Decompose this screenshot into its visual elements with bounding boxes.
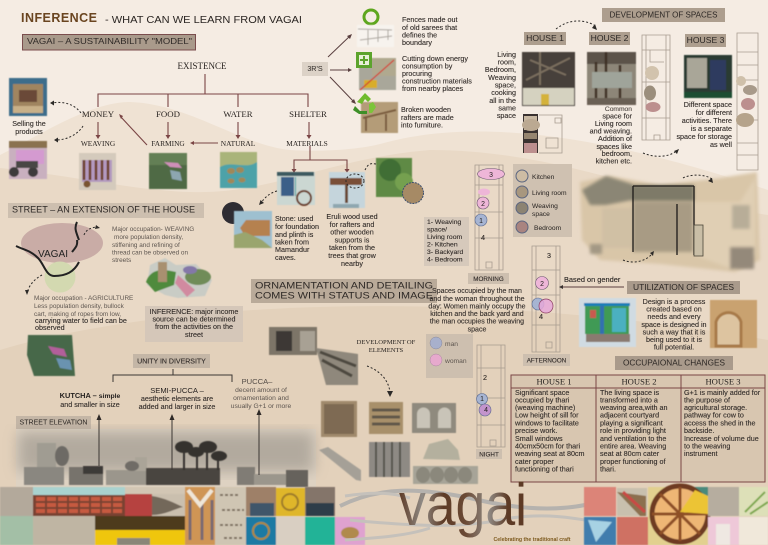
text: development of elements: DEVELOPMENT OF xyxy=(357,339,416,346)
icon: recycle xyxy=(353,93,376,114)
panel: floor plan afternoon xyxy=(523,246,570,366)
existence tree diagram: SHELTER xyxy=(289,109,327,119)
panel: floor plan afternoon: 3 xyxy=(547,251,551,260)
text: reuse, reduce, recycle: Fences made out xyxy=(402,15,458,24)
text: agriculture occupation: cart, making of ropes from low, xyxy=(34,311,121,318)
text: weaving occupation: stiffening and refining of xyxy=(112,242,180,249)
text: weaving occupation: more population density, xyxy=(114,234,183,241)
existence tree diagram: MONEY xyxy=(82,109,115,119)
callout: inference: street xyxy=(185,330,203,339)
text: building types: added and larger in size xyxy=(139,402,215,411)
table: occupational changes: entire area. Weaving xyxy=(600,442,666,450)
table: occupational changes: role in providing light xyxy=(600,426,666,435)
existence tree diagram: FOOD xyxy=(156,109,180,119)
text: reuse, reduce, recycle: into furniture. xyxy=(401,120,443,130)
panel: floor plan morning: MORNING xyxy=(473,276,504,283)
heading: utilization of spaces: UTILIZATION OF SPACES xyxy=(633,283,734,292)
panel: house 1 xyxy=(485,32,575,153)
map: vagai xyxy=(16,222,103,295)
panel: house 3: activities. There xyxy=(682,116,732,125)
panel: floor plan morning: 1 xyxy=(479,218,483,225)
table: occupational changes: Increase of volume due xyxy=(684,434,759,443)
panel: house 1: space, xyxy=(495,80,516,90)
table: occupational changes xyxy=(511,375,765,482)
text: agriculture occupation: Major occupation - AGRICULTURE xyxy=(34,295,133,302)
text: building types: ornamentation and xyxy=(233,395,289,402)
table: occupational changes: playing a significant xyxy=(600,418,663,428)
panel: floor plan morning: 4 xyxy=(481,233,485,242)
text: stone: taken from xyxy=(275,238,309,246)
table: occupational changes: transformed into a xyxy=(600,396,658,404)
text: design is a process: needs and every xyxy=(647,312,701,321)
icon: selling shop painting xyxy=(9,78,47,116)
table: occupational changes: Significant space xyxy=(515,388,569,397)
heading: sustainability model: VAGAI – A SUSTAINABILITY "MODEL" xyxy=(27,36,192,46)
legend: room colours: Living room xyxy=(532,190,567,197)
title: INFERENCE xyxy=(21,11,97,25)
logo: vagai xyxy=(340,471,585,543)
text: stone: Stone: used xyxy=(275,214,313,223)
icon: wooden rafter painting xyxy=(329,172,365,208)
text: stone: caves. xyxy=(275,253,296,262)
panel: house 3: HOUSE 3 xyxy=(687,35,725,45)
text: building types xyxy=(60,377,291,411)
text: eruli wood: other wooden xyxy=(330,228,374,236)
heading: development of spaces xyxy=(602,8,725,22)
table: occupational changes: functioning of thari xyxy=(515,464,574,474)
text: stone: Mamandur xyxy=(275,245,310,254)
text: reuse, reduce, recycle: construction materials xyxy=(402,76,472,86)
text: based on gender xyxy=(559,275,624,289)
panel: house 3: space for storage xyxy=(676,132,732,141)
panel: floor plan morning: 2 xyxy=(481,201,485,208)
icon: green house painting xyxy=(579,298,636,347)
legend: room colours: Bedroom xyxy=(534,225,562,232)
logo: vagai: Celebrating the traditional craft xyxy=(494,537,571,543)
text: development of elements: ELEMENTS xyxy=(369,347,404,354)
icon: ring logo xyxy=(364,10,378,24)
table: occupational changes: weaving seat at 80cm xyxy=(514,449,585,458)
logo: vagai: vagai xyxy=(399,471,527,538)
table: occupational changes: precise work. xyxy=(515,426,557,435)
heading: ornamentation xyxy=(251,279,437,303)
table: occupational changes: weaving area,with an xyxy=(599,403,668,412)
icon: bike painting xyxy=(9,141,47,179)
panel: house 1: cooking xyxy=(491,88,516,97)
panel: house 2: HOUSE 2 xyxy=(591,33,629,43)
table: occupational changes: thari. xyxy=(600,464,616,474)
icon: house material painting xyxy=(277,172,315,205)
caption: selling the products xyxy=(12,119,46,136)
text: reuse, reduce, recycle xyxy=(401,15,472,130)
text: weaving occupation: thread can be observed on xyxy=(112,250,188,256)
text: reuse, reduce, recycle: procuring xyxy=(402,69,432,78)
text: agriculture occupation xyxy=(34,295,133,332)
heading: ornamentation: COMES WITH STATUS AND IMAGE xyxy=(255,290,433,300)
table: occupational changes: (weaving machine) xyxy=(515,403,575,412)
table: occupational changes: proper functioning of xyxy=(600,457,666,466)
text: reuse, reduce, recycle: rafters are made xyxy=(401,113,454,122)
icon: arch painting xyxy=(710,300,757,348)
collage: bottom left textures xyxy=(0,487,365,545)
panel: floor plan afternoon: 4 xyxy=(539,312,543,321)
text: agriculture occupation: Less population density, bullock xyxy=(34,303,125,310)
text: building types: and smaller in size xyxy=(60,400,120,409)
table: occupational changes: cater proper xyxy=(515,457,554,466)
text: building types: KUTCHA – simple xyxy=(60,391,121,400)
icon: street painting xyxy=(146,258,212,298)
photos: ornament elements xyxy=(319,401,478,484)
text: spaces occupied by gender: space xyxy=(468,326,486,334)
map: vagai: VAGAI xyxy=(38,248,68,260)
arrow: elements xyxy=(367,366,393,397)
table: occupational changes: backside. xyxy=(684,426,714,435)
icon: tree photo xyxy=(376,158,413,197)
table: occupational changes: adjacent courtyard xyxy=(600,410,659,420)
legend: room numbers: 3- Backyard xyxy=(427,249,463,256)
panel: house 1: all in the xyxy=(489,96,516,105)
3R's label: 3R'S xyxy=(307,64,323,73)
heading: street elevation: STREET ELEVATION xyxy=(20,418,88,426)
text: spaces occupied by gender: the man occupies the weaving xyxy=(430,318,524,326)
panel: floor plan afternoon: 2 xyxy=(540,281,544,288)
heading: unity in diversity: UNITY IN DIVERSITY xyxy=(137,358,206,366)
text: building types: SEMI-PUCCA – xyxy=(150,386,205,395)
text: reuse, reduce, recycle: Broken wooden xyxy=(401,105,451,114)
text: agriculture occupation: carrying water to field can be xyxy=(35,316,127,325)
text: building types: PUCCA– xyxy=(242,377,273,386)
text: eruli wood: for rafters and xyxy=(330,220,374,229)
heading: occupational changes: OCCUPAIONAL CHANGES xyxy=(623,358,725,368)
panel: house 2: Common xyxy=(605,106,632,113)
legend: man and woman: woman xyxy=(444,358,467,365)
text: reuse, reduce, recycle: of old sarees that xyxy=(402,23,457,32)
panel: floor plan morning: 3 xyxy=(489,172,493,179)
panel: house 2: and weaving. xyxy=(590,126,632,136)
table: occupational changes: HOUSE 1 xyxy=(536,376,572,386)
legend: room numbers: Living room xyxy=(427,234,462,241)
title xyxy=(21,11,302,26)
text: reuse, reduce, recycle: boundary xyxy=(402,38,432,47)
panel: house 1: HOUSE 1 xyxy=(526,33,564,43)
panel: floor plan night: 4 xyxy=(484,407,488,414)
text: building types: decent amount of xyxy=(235,387,287,394)
table: occupational changes: HOUSE 2 xyxy=(621,376,657,386)
table: occupational changes: Low height of sill for xyxy=(515,410,579,420)
text: based on gender: Based on gender xyxy=(564,275,621,284)
text: reuse, reduce, recycle: defines the xyxy=(402,30,437,40)
icon: weaving loom painting xyxy=(79,153,116,190)
icon: rafter furniture photo xyxy=(361,102,398,133)
panel: house 1: same xyxy=(498,104,516,112)
text: spaces occupied by gender: day: Women mainly occupy the xyxy=(428,304,526,310)
text: spaces occupied by gender: and the woman throughout the xyxy=(430,296,525,303)
text: eruli wood: supports is xyxy=(335,236,370,244)
text: reuse, reduce, recycle: Cutting down energy xyxy=(402,54,468,63)
text: design is a process: being used to it is xyxy=(646,335,702,344)
text: eruli wood: taken from the xyxy=(329,243,375,252)
panel: house 2: Living room xyxy=(595,119,632,128)
icon: energy square xyxy=(356,52,372,68)
text: spaces occupied by gender: Spaces occupied by the man xyxy=(432,288,522,295)
table: occupational changes: 40cmx50cm for thari xyxy=(515,442,581,450)
collage: bottom right textures xyxy=(584,486,768,545)
heading: street xyxy=(8,203,204,218)
panel: house 3: as well xyxy=(710,140,732,149)
table: occupational changes: seat at 80cm cater xyxy=(600,449,660,458)
icon: natural water painting xyxy=(220,152,257,188)
legend: room colours: Kitchen xyxy=(532,174,555,181)
panel: house 1: Weaving xyxy=(488,73,516,82)
legend: room colours xyxy=(513,164,572,237)
legend: room numbers: 2- Kitchen xyxy=(427,242,458,248)
existence tree diagram: WATER xyxy=(223,109,253,119)
callout: inference: from the activities on the xyxy=(155,322,233,331)
table: occupational changes: HOUSE 3 xyxy=(705,376,741,386)
table: occupational changes: Small windows xyxy=(515,434,563,443)
legend: man and woman: man xyxy=(445,341,458,348)
legend: man and woman xyxy=(426,334,473,378)
panel: house 3: for different xyxy=(696,108,732,117)
panel: floor plan night: 1 xyxy=(480,396,484,403)
text: reuse, reduce, recycle: from nearby places xyxy=(402,84,464,93)
panel: house 1: Living xyxy=(497,50,516,59)
text: weaving occupation: streets xyxy=(112,257,131,264)
panel: house 3: is a separate xyxy=(691,124,732,133)
existence tree diagram: FARMING xyxy=(151,139,185,148)
legend: room numbers: space/ xyxy=(427,226,447,234)
panel: floor plan night: 2 xyxy=(483,373,487,382)
icon: road photo xyxy=(359,58,396,90)
panel: floor plan afternoon: AFTERNOON xyxy=(527,358,567,364)
text: reuse, reduce, recycle: consumption by xyxy=(402,62,453,70)
existence tree diagram xyxy=(81,61,350,173)
heading: unity in diversity xyxy=(113,354,232,382)
icon: cave painting xyxy=(234,211,272,248)
heading: ornamentation: ORNAMENTATION AND DETAILING xyxy=(255,280,433,290)
panel: floor plan night: NIGHT xyxy=(479,452,499,458)
existence tree diagram: NATURAL xyxy=(221,139,256,148)
icon: wood texture circle xyxy=(402,182,424,204)
heading: sustainability model xyxy=(22,34,196,50)
text: eruli wood: Eruli wood used xyxy=(326,212,378,221)
panel: house 1: Bedroom, xyxy=(485,65,516,74)
text: stone: and plinth is xyxy=(275,230,314,239)
table: occupational changes: and ventilation to the xyxy=(600,434,666,443)
panel: house 3 xyxy=(676,33,758,170)
text: design is a process: space is designed in xyxy=(641,320,707,329)
table: occupational changes: the purpose of xyxy=(684,396,730,404)
panel: house 2 xyxy=(587,32,670,166)
text: stone: for foundation xyxy=(275,222,319,231)
text: building types: aesthetic elements are xyxy=(141,394,213,403)
panel: floor plan morning xyxy=(468,165,509,284)
existence tree diagram: EXISTENCE xyxy=(178,61,227,71)
table: occupational changes: access the shed in the xyxy=(684,418,756,428)
table: occupational changes: agricultural storage. xyxy=(684,403,747,412)
arrows: 3R's to examples xyxy=(328,34,356,104)
text: design is a process: Design is a process xyxy=(643,297,706,306)
text: weaving occupation xyxy=(112,226,194,264)
text: spaces occupied by gender: kitchen and the back yard and xyxy=(430,311,524,318)
panel: house 1: space xyxy=(497,111,516,120)
table: occupational changes: windows to facilitate xyxy=(514,418,579,428)
table: occupational changes: G+1 is mainly added for xyxy=(684,388,761,397)
title: - WHAT CAN WE LEARN FROM VAGAI xyxy=(105,15,302,26)
arrows: money to selling xyxy=(50,100,83,142)
arrows: material details xyxy=(259,164,376,205)
icon: farming painting xyxy=(149,153,187,189)
existence tree diagram: MATERIALS xyxy=(286,139,328,148)
heading: occupational changes xyxy=(615,356,733,370)
legend: room colours: Weaving xyxy=(532,203,558,210)
panel: floor plan night xyxy=(476,345,505,459)
icon: farm painting xyxy=(27,335,75,376)
panel: house 2: space for xyxy=(602,112,633,120)
table: occupational changes: pathway for cow to xyxy=(684,410,744,420)
caption: selling the products: Selling the xyxy=(12,119,46,128)
callout: inference xyxy=(145,306,243,342)
arrow: house 1 to house 2 xyxy=(556,21,597,30)
street elevation drawing xyxy=(16,409,316,487)
panel: house 2: spaces like xyxy=(596,142,632,151)
text: agriculture occupation: observed xyxy=(35,323,65,332)
panel: house 2: bedroom, xyxy=(602,149,632,158)
legend: room colours: space xyxy=(532,211,550,218)
table: occupational changes: The living space is xyxy=(600,388,660,397)
arrow: house 2 to house 3 xyxy=(643,149,679,156)
heading: street: STREET – AN EXTENSION OF THE HOUSE xyxy=(12,204,195,214)
text: eruli wood: nearby xyxy=(341,259,363,268)
heading: development of spaces: DEVELOPMENT OF SPACES xyxy=(610,10,718,20)
text: design is a process: created based on xyxy=(646,304,702,314)
legend: room numbers: 4- Bedroom xyxy=(427,256,463,264)
sketch: interior of house xyxy=(580,172,760,272)
panel: house 2: kitchen etc. xyxy=(596,156,632,166)
callout: inference: INFERENCE: major income xyxy=(150,307,238,316)
caption: selling the products: products xyxy=(15,127,43,136)
legend: room numbers xyxy=(424,217,469,266)
table: occupational changes: instrument xyxy=(684,449,718,458)
legend: room numbers: 1- Weaving xyxy=(427,219,461,226)
existence tree diagram: WEAVING xyxy=(81,139,116,148)
icon: stone texture circle xyxy=(222,202,244,224)
panel: house 2: Addition of xyxy=(598,134,632,143)
table: occupational changes: to the weaving xyxy=(684,442,730,450)
panel: house 1: room, xyxy=(498,58,516,66)
heading: street elevation xyxy=(16,416,91,429)
icon: fence sketch xyxy=(357,25,394,47)
text: design is a process: such a way that it is xyxy=(643,328,706,336)
text: design is a process: full potential. xyxy=(654,342,694,352)
heading: utilization of spaces xyxy=(627,281,740,294)
photos: building elements xyxy=(269,327,358,385)
callout: inference: source can be determined xyxy=(152,314,236,324)
table: occupational changes: occupied by thari xyxy=(515,396,570,404)
text: building types: usually G+1 or more xyxy=(231,403,291,410)
text: eruli wood: trees that grow xyxy=(328,251,377,260)
text: weaving occupation: Major occupation- WEAVING xyxy=(112,226,194,233)
panel: house 3: Different space xyxy=(684,100,732,109)
3R's label xyxy=(302,62,328,76)
